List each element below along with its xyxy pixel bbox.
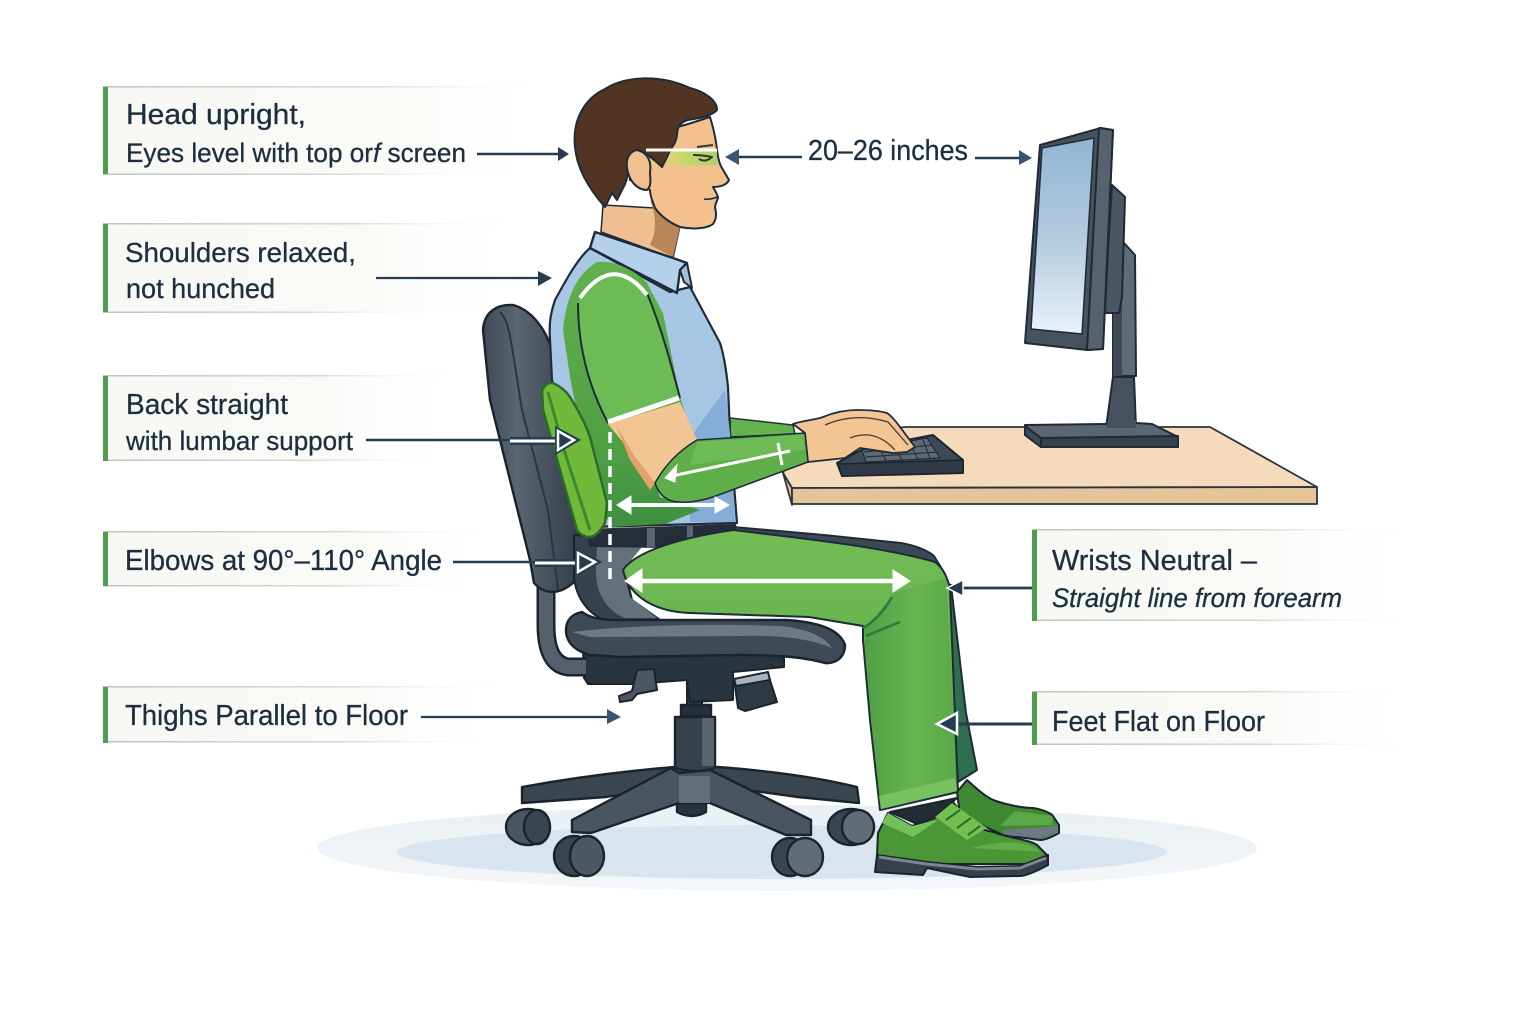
monitor housing [1105,185,1125,313]
back chair legs [522,767,859,803]
arrow: feet [937,713,1032,734]
gas cylinder [675,717,715,771]
monitor screen [1031,138,1094,334]
ear [627,150,650,190]
face [628,117,729,228]
eye [693,145,713,161]
neck [601,200,680,258]
heading: thighs parallel: Thighs Parallel to Floor [125,700,408,732]
back shoe [957,780,1059,840]
shoe sole [875,855,1048,877]
shirt torso [550,248,737,527]
white measurement guides [610,432,910,592]
arrow: shoulders [376,271,552,286]
trousers [623,527,977,810]
arrow: head to eyes [477,147,569,161]
monitor base [1025,423,1178,447]
panel: back straight [103,375,463,461]
heading: shoulders relaxed: Shoulders relaxed, [125,237,356,268]
back caster right [828,809,874,845]
chair base [506,705,874,876]
collar [590,232,687,293]
arrow: wrists [947,580,1032,596]
hand [793,410,915,462]
finger lines [825,418,908,450]
toe highlight [972,842,1040,852]
forearm highlight [690,435,804,465]
panel: elbows [103,531,498,586]
front chair legs [572,768,811,835]
trousers hip section [574,535,660,622]
back caster left [506,809,550,845]
front caster left [554,836,604,876]
green torso zone [563,262,700,527]
floor shadow [317,805,1257,891]
arrow: distance label to screen [975,150,1032,165]
trouser cuff [879,778,957,809]
shoe collar [882,813,938,837]
heading: wrists neutral: Wrists Neutral – [1052,545,1258,577]
panel: head upright [103,86,550,175]
panel: feet flat [1032,691,1417,745]
front shoe upper [877,802,1048,864]
desk [783,427,1317,505]
sock [890,798,957,824]
arrow: thighs [421,709,621,724]
collar tip [680,263,692,288]
panel: thighs [103,686,508,743]
forearm arrow [665,443,790,482]
lower leg [864,578,957,809]
leg outline [623,530,958,810]
heading: elbows angle: Elbows at 90°–110° Angle [125,545,442,577]
arrow: lumbar [366,431,575,450]
thigh upper band [733,527,945,574]
arrow: elbows [453,553,596,572]
lumbar pad [542,383,607,537]
elbow double arrow [617,496,729,514]
forearm [655,433,808,502]
eye band [648,150,717,165]
knee wrinkles [863,597,900,636]
monitor bezel [1025,128,1113,350]
hair [575,78,717,207]
mouth [704,197,717,199]
belt [584,524,738,548]
monitor [1025,128,1178,447]
text: lumbar support: with lumbar support [125,426,354,456]
lower leg back shadow [945,583,977,782]
heading: head upright: Head upright, [126,99,306,131]
monitor neck [1106,377,1136,428]
panel: wrists neutral [1032,529,1417,621]
thigh double arrow [625,569,910,592]
far arm sleeve [730,418,795,437]
text: not hunched: not hunched [126,273,275,304]
heading: back straight: Back straight [126,389,288,421]
text: eyes level: Eyes level with top orf screen [126,138,466,168]
blue shadow [690,390,735,522]
chair mechanism [583,650,784,711]
person [550,78,915,548]
distance label: 20–26 inches [808,135,968,167]
spine dashed line [608,432,612,585]
chair arm bar [546,585,586,667]
sleeve edges [578,293,680,423]
eye level line [646,148,717,152]
lacing panel [935,803,987,840]
shoulder arc [580,274,647,298]
keyboard [837,435,963,476]
monitor stand arm [1113,243,1136,376]
text: straight line: Straight line from forearm [1052,583,1342,613]
sole strip [879,857,1046,869]
chair backrest [483,305,580,592]
chair seat [566,612,845,663]
upper arm [608,402,697,483]
shoes [875,780,1059,877]
heading: feet flat: Feet Flat on Floor [1052,706,1265,738]
sleeve [578,275,680,423]
front caster right [772,838,823,876]
arm shadow [616,425,655,490]
arrow: eyes to distance label [725,149,802,165]
hub [677,803,706,816]
sleeve band [608,398,679,422]
seat lever [619,669,657,702]
panel: shoulders [103,223,520,313]
